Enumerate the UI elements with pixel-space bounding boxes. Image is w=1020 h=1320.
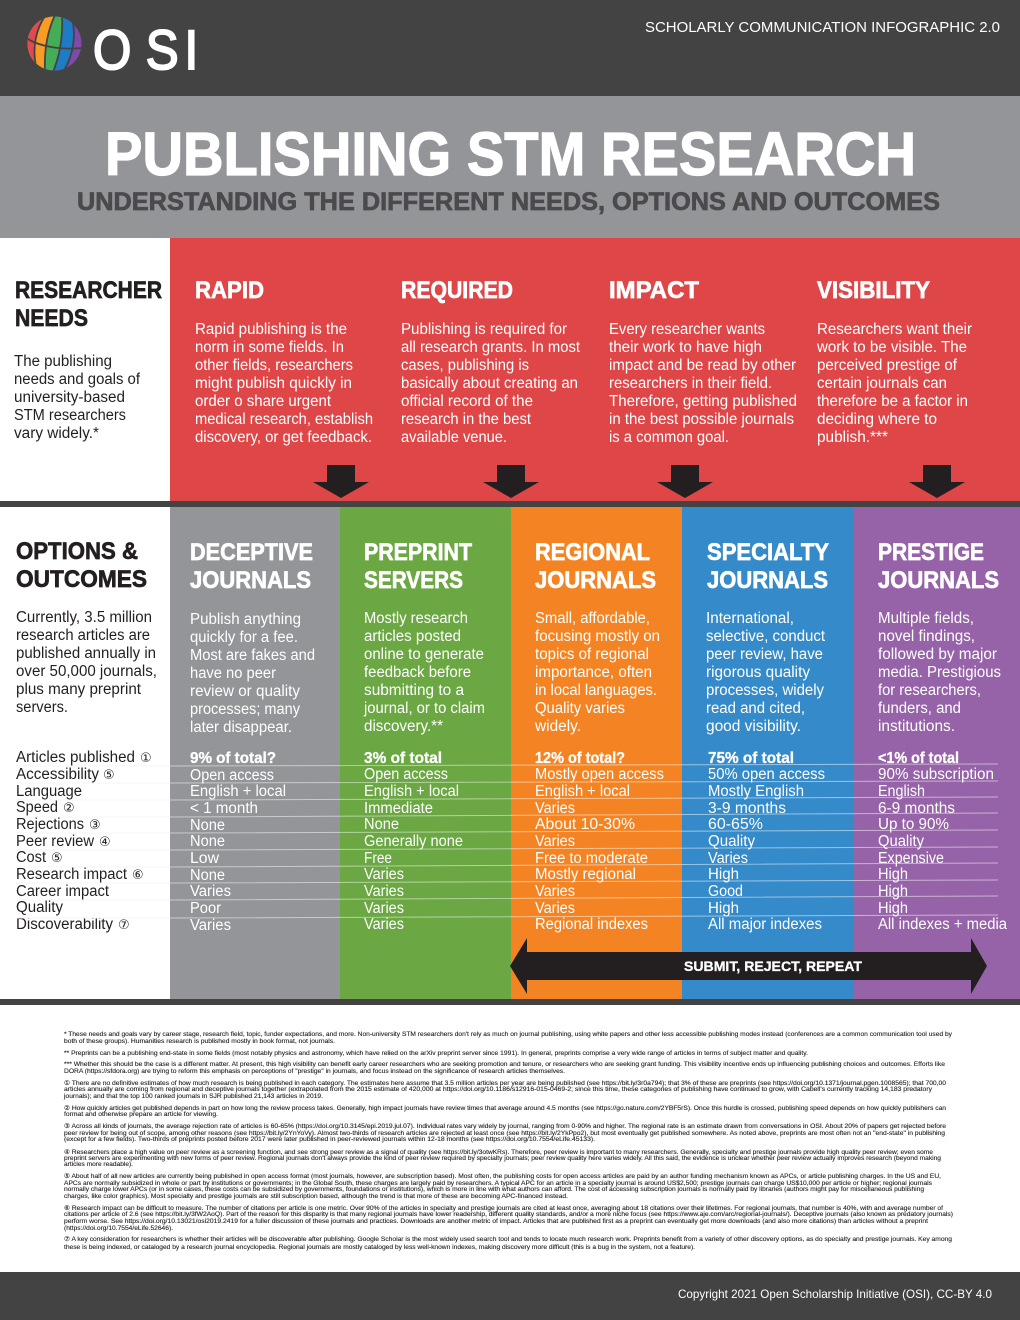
copyright: Copyright 2021 Open Scholarship Initiative (OSI), CC-BY 4.0: [678, 1287, 992, 1301]
text: deceptive body: later disappear.: [190, 719, 292, 736]
text: visibility body: deciding where to: [817, 411, 937, 428]
text: deceptive body: Most are fakes and: [190, 647, 315, 664]
text: specialty body: processes, widely: [706, 682, 824, 699]
panel: required: [401, 277, 581, 446]
footnote 7: these is being indexed, or cataloged by a research journal encyclopedia. Regional journals are mostly cataloged by less well-known indexes, making discovery more difficult (this is a bug in the system, not a feature).: [64, 1244, 695, 1251]
arrow: down 4: [909, 465, 965, 498]
table values: preprint: Varies: [364, 883, 404, 900]
table values: prestige: Expensive: [878, 850, 944, 867]
arrow label: SUBMIT, REJECT, REPEAT: [684, 958, 862, 974]
text: preprint body: submitting to a: [364, 682, 464, 699]
footnote 4: articles more readable).: [64, 1161, 133, 1168]
heading: regional journals: REGIONAL: [535, 539, 650, 566]
text: deceptive body: [190, 611, 315, 736]
table row labels: Speed: [16, 799, 58, 816]
table row labels: Accessibility: [16, 766, 99, 783]
table values: preprint: English + local: [364, 783, 459, 800]
table values: specialty: Good: [708, 883, 743, 900]
table row labels: Peer review: [16, 833, 95, 850]
text: specialty body: International,: [706, 610, 794, 627]
text: impact body: their work to have high: [609, 339, 762, 356]
table row labels: Cost: [16, 849, 47, 866]
table row labels: Research impact: [16, 866, 128, 883]
text: options description: research articles are: [16, 627, 150, 644]
title band: [0, 96, 1020, 238]
table row labels: ⑤: [51, 851, 63, 866]
heading: prestige journals: PRESTIGE: [878, 539, 984, 566]
table row labels: Articles published: [16, 749, 135, 766]
panel: regional journals: [534, 539, 664, 933]
heading: researcher needs: NEEDS: [15, 305, 88, 332]
table row labels: ⑤: [103, 768, 115, 783]
text: visibility body: certain journals can: [817, 375, 947, 392]
table values: deceptive: Varies: [190, 917, 231, 934]
footnote 5: charges, like color graphics). Most specialty and prestige journals are still subscription based, although the trend is that more of these are becoming APC-financed instead.: [64, 1193, 568, 1200]
table values: specialty: 3-9 months: [708, 800, 786, 817]
table values: regional: Mostly open access: [535, 766, 664, 783]
panel: deceptive journals: [190, 539, 315, 934]
table values: specialty: 75% of total: [708, 750, 794, 767]
footnote 1: journals); and that the top 100 ranked journals in SJR published 21,143 articles in 2019.: [63, 1093, 323, 1100]
table values: specialty: Varies: [708, 850, 748, 867]
text: regional body: in local languages.: [535, 682, 657, 699]
panel: visibility: [816, 277, 972, 446]
text: deceptive body: have no peer: [190, 665, 276, 682]
heading: researcher needs: RESEARCHER: [15, 277, 162, 304]
footnote 6: (https://doi.org/10.7554/eLife.52646).: [64, 1225, 173, 1232]
text: deceptive body: review or quality: [190, 683, 300, 700]
table values: prestige: High: [878, 900, 908, 917]
text: specialty body: read and cited,: [706, 700, 805, 717]
text: rapid body: order o share urgent: [195, 393, 332, 410]
table values: regional: Varies: [535, 833, 575, 850]
table row labels: ①: [140, 751, 152, 766]
table values: regional: [535, 750, 664, 933]
text: rapid body: discovery, or get feedback.: [195, 429, 372, 446]
text: regional body: topics of regional: [535, 646, 649, 663]
text: options description: servers.: [16, 699, 68, 716]
table values: specialty: Quality: [708, 833, 755, 850]
text: options description: over 50,000 journals,: [16, 663, 157, 680]
icon: OSI globe logo: [28, 16, 82, 70]
text: required body: cases, publishing is: [401, 357, 529, 374]
panel: needs background: [170, 238, 1020, 501]
text: prestige body: novel findings,: [878, 628, 975, 645]
text: required body: Publishing is required for: [401, 321, 567, 338]
heading: regional journals: [535, 539, 656, 594]
footnote 3: [64, 1122, 946, 1143]
table row labels: Quality: [16, 899, 63, 916]
text: options description: published annually in: [16, 645, 156, 662]
table values: specialty: High: [708, 900, 739, 917]
table values: regional: 12% of total?: [535, 750, 625, 767]
text: researcher needs description: The publishing: [14, 353, 112, 370]
table row labels: ⑥: [132, 868, 144, 883]
text: impact body: is a common goal.: [609, 429, 729, 446]
table values: regional: About 10-30%: [535, 816, 635, 833]
text: preprint body: articles posted: [364, 628, 461, 645]
footnote 3: ③ Across all kinds of journals, the average rejection rate of articles is 60-65% (https://doi.org/10.3145/epi.2019.jul.07). Individual rates vary widely by journal, ranging from 0-90% and higher. The regional rate is an estimate drawn from conversations in OSI. About 20% of papers get rejected before: [64, 1122, 946, 1130]
heading: impact: IMPACT: [609, 277, 699, 304]
footnote: asterisk: [64, 1031, 953, 1045]
text: deceptive body: Publish anything: [190, 611, 301, 628]
table values: deceptive: None: [190, 833, 225, 850]
text: visibility body: publish.***: [817, 429, 888, 446]
footnote 4: ④ Researchers place a high value on peer review as a screening function, and see strong peer review as a signal of quality (see https://bit.ly/3otwKRs). Therefore, peer review is important to many researchers. Generally, specialty and prestige journals provide high quality peer review; even some: [64, 1148, 933, 1156]
text: impact body: in the best possible journals: [609, 411, 794, 428]
text: specialty body: good visibility.: [706, 718, 801, 735]
text: specialty body: selective, conduct: [706, 628, 826, 645]
text: deceptive body: quickly for a fee.: [190, 629, 298, 646]
text: prestige body: institutions.: [878, 718, 955, 735]
table values: prestige: High: [878, 866, 908, 883]
table values: deceptive: None: [190, 817, 225, 834]
heading: researcher needs: [15, 277, 162, 332]
table values: deceptive: English + local: [190, 783, 286, 800]
text: preprint body: Mostly research: [364, 610, 468, 627]
table row labels: ⑦: [118, 918, 130, 933]
text: preprint body: feedback before: [364, 664, 471, 681]
footnote 7: [64, 1235, 952, 1251]
text: specialty body: rigorous quality: [706, 664, 810, 681]
text: rapid body: [195, 321, 373, 446]
footnote 4: preprint servers are experimenting with new forms of peer review. Regional journals don't always provide the kind of peer review required by specialty journals; peer review quality here varies widely. All this said, the evidence is unclear whether peer review actually improves research (beyond making: [64, 1155, 941, 1162]
table values: prestige: 90% subscription: [878, 766, 994, 783]
footnote 6: citations per article of 2.6 (see https://bit.ly/3fW2AoQ). Part of the reason for this disparity is that many regional journals have lower readership, different quality standards, and/or a more niche focus (see https://www.aje.com/arc/regional-journals/). Deceptive journals (also known as predatory journals): [64, 1211, 953, 1218]
text: options description: plus many preprint: [16, 681, 142, 698]
footnote: double asterisk: ** Preprints can be a publishing end-state in some fields (most notably physics and astronomy, which have relied on the arXiv preprint server since 1991). In general, preprints comprise a very wide range of articles in terms of subject matter and quality.: [64, 1050, 808, 1057]
text: required body: research in the best: [401, 411, 532, 428]
heading: prestige journals: JOURNALS: [878, 567, 999, 594]
text: regional body: Small, affordable,: [535, 610, 650, 627]
footnote 2: ② How quickly articles get published depends in part on how long the review process takes. Generally, high impact journals have review times that average around 4.5 months (see https://go.nature.com/2YBF5rS). Once this hurdle is crossed, publishing speed depends on how quickly publishers can: [64, 1104, 946, 1112]
text: researcher needs description: [14, 353, 141, 442]
footnote 2: format and otherwise prepare an article for viewing.: [64, 1111, 218, 1118]
footnote 2: [64, 1104, 946, 1118]
text: visibility body: [816, 321, 972, 446]
column backgrounds: [170, 507, 1020, 999]
table values: deceptive: < 1 month: [190, 800, 258, 817]
heading: preprint servers: PREPRINT: [364, 539, 472, 566]
text: rapid body: norm in some fields. In: [195, 339, 344, 356]
footnotes: [63, 1031, 953, 1251]
text: options description: Currently, 3.5 million: [16, 609, 152, 626]
table values: specialty: Mostly English: [708, 783, 804, 800]
table values: prestige: Up to 90%: [878, 816, 949, 833]
footnote 1: [63, 1079, 946, 1100]
heading: options and outcomes: OUTCOMES: [16, 566, 147, 593]
text: rapid body: Rapid publishing is the: [195, 321, 347, 338]
heading: specialty journals: [707, 539, 829, 594]
panel: options and outcomes intro: [16, 538, 157, 716]
panel: preprint servers: [363, 539, 485, 933]
footnote 7: ⑦ A key consideration for researchers is whether their articles will be discoverable after publishing. Google Scholar is the most widely used search tool and tends to locate much research work. Preprints benefit from a variety of other discovery options, as do specialty and prestige journals. Key among: [64, 1235, 952, 1243]
table values: regional: Varies: [535, 800, 575, 817]
text: impact body: researchers in their field.: [609, 375, 772, 392]
heading: specialty journals: SPECIALTY: [707, 539, 829, 566]
text: regional body: importance, often: [535, 664, 652, 681]
text: required body: basically about creating an: [401, 375, 578, 392]
text: deceptive body: processes; many: [190, 701, 300, 718]
table values: preprint: Varies: [364, 900, 404, 917]
footnote 4: [64, 1148, 941, 1168]
text: visibility body: Researchers want their: [817, 321, 972, 338]
panel: impact: [609, 277, 797, 446]
heading: required: REQUIRED: [401, 277, 513, 304]
table values: preprint: None: [364, 816, 399, 833]
footnote 3: peer review for being out of scope, among other reasons (see https://bit.ly/2YnYoVy). Almost two-thirds of research articles are rejected at least once (see https://bit.ly/2YkPpo2), but most eventually get published somewhere. As noted above, preprints are most often not an "end-state" in publishing: [64, 1130, 945, 1137]
table row labels: [16, 749, 152, 933]
table values: preprint: Free: [364, 850, 392, 867]
text: visibility body: work to be visible. The: [816, 339, 967, 356]
table values: deceptive: Poor: [190, 900, 221, 917]
divider bar top: [0, 501, 1020, 507]
text: rapid body: other fields, researchers: [195, 357, 353, 374]
table values: regional: Free to moderate: [535, 850, 648, 867]
footnote 1: articles annually are coming from regional and deceptive journals together (extrapolated from the 2015 estimate of 420,000 at https://doi.org/10.1186/s12916-015-0469-2; since this time, these categories of publishing have continued to grow, with Cabell's currently tracking 14,183 predatory: [64, 1086, 933, 1093]
arrow: down 1: [313, 465, 369, 498]
panel: prestige journals: [878, 539, 1007, 933]
text: required body: all research grants. In most: [401, 339, 581, 356]
text: regional body: focusing mostly on: [535, 628, 660, 645]
text: visibility body: perceived prestige of: [817, 357, 958, 374]
divider bar bottom: [0, 999, 1020, 1005]
table values: deceptive: 9% of total?: [190, 750, 276, 767]
table values: specialty: High: [708, 866, 739, 883]
footer bar: [0, 1272, 1020, 1320]
arrow: submit, reject, repeat: [510, 938, 987, 994]
text: prestige body: for researchers,: [878, 682, 981, 699]
table values: deceptive: [190, 750, 286, 934]
heading: preprint servers: SERVERS: [364, 567, 463, 594]
text: preprint body: online to generate: [364, 646, 484, 663]
footnote 5: normally charge lower APCs (or in some cases, these costs can be subsidized by governments, foundations or institutions), which is more in line with what authors can afford. The cost of accessing subscription journals is normally paid by libraries (authors might pay for miscellaneous publishing: [64, 1186, 924, 1193]
series label: SCHOLARLY COMMUNICATION INFOGRAPHIC 2.0: [645, 19, 1000, 36]
logo wordmark: OSI: [93, 19, 198, 82]
table values: deceptive: Varies: [190, 883, 231, 900]
panel: specialty journals: [706, 539, 829, 933]
footnote 6: perform worse. See https://doi.org/10.13021/osi2019.2419 for a fuller discussion of these journals and practices. Downloads are another metric of impact. Articles that are published first as a preprint can eventually get more downloads (and also more citations) than articles without a preprint: [64, 1218, 928, 1225]
heading: prestige journals: [878, 539, 999, 594]
text: preprint body: journal, or to claim: [363, 700, 485, 717]
text: researcher needs description: vary widely.*: [14, 425, 99, 442]
table values: deceptive: Low: [190, 850, 220, 867]
table values: preprint: [364, 750, 463, 933]
table values: prestige: <1% of total: [878, 750, 959, 767]
text: researcher needs description: university-based: [14, 389, 125, 406]
text: specialty body: peer review, have: [706, 646, 823, 663]
table row labels: Rejections: [16, 816, 84, 833]
panel: rapid: [195, 277, 373, 446]
text: impact body: impact and be read by other: [609, 357, 796, 374]
text: required body: official record of the: [401, 393, 533, 410]
arrow: down 2: [483, 465, 539, 498]
footnote: asterisk: * These needs and goals vary by career stage, research field, topic, funder expectations, and more. Non-university STM researchers don't rely as much on journal publishing, using white papers and other less accessible publishing modes instead (conferences are a common communication tool used by: [64, 1031, 953, 1038]
table values: specialty: 60-65%: [708, 816, 763, 833]
arrow: down 3: [657, 465, 713, 498]
text: specialty body: [706, 610, 826, 735]
heading: specialty journals: JOURNALS: [707, 567, 828, 594]
table values: deceptive: None: [190, 867, 225, 884]
footnote 5: [64, 1172, 941, 1200]
footnote 1: ① There are no definitive estimates of how much research is being published in each category. The estimates here assume that 3.5 million articles per year are being published (see https://bit.ly/3r0a794); that 3% of these are preprints (see https://doi.org/10.1371/journal.pgen.1008565); that 700,00: [64, 1079, 946, 1087]
text: preprint body: [363, 610, 485, 735]
table values: specialty: All major indexes: [708, 916, 822, 933]
footnote: triple asterisk: DORA (https://sfdora.org) are trying to reform this emphasis on perceptions of "prestige" in journals, and focus instead on the significance of research articles themselves.: [64, 1068, 565, 1075]
text: regional body: [534, 610, 660, 735]
text: impact body: [609, 321, 797, 446]
table values: preprint: Varies: [364, 866, 404, 883]
heading: regional journals: JOURNALS: [535, 567, 656, 594]
table values: regional: Varies: [535, 883, 575, 900]
heading: preprint servers: [364, 539, 472, 594]
table values: preprint: Immediate: [364, 800, 433, 817]
text: required body: available venue.: [401, 429, 507, 446]
heading: rapid: RAPID: [195, 277, 264, 304]
table values: specialty: [708, 750, 825, 933]
heading: options and outcomes: [16, 538, 147, 593]
table values: preprint: Open access: [364, 766, 448, 783]
heading: deceptive journals: [190, 539, 313, 594]
table values: prestige: Quality: [878, 833, 924, 850]
text: prestige body: Multiple fields,: [878, 610, 974, 627]
text: required body: [401, 321, 581, 446]
table values: preprint: 3% of total: [364, 750, 442, 767]
text: prestige body: media. Prestigious: [878, 664, 1001, 681]
text: rapid body: might publish quickly in: [195, 375, 352, 392]
footnote: triple asterisk: *** Whether this should be the case is a different matter. At present, this high visibility can benefit early career researchers who are seeking promotion and tenure, or researchers who are seeking grant funding. This visibility incentive ends up influencing publishing choices and outcomes. Efforts like: [64, 1061, 945, 1068]
table values: deceptive: Open access: [190, 767, 274, 784]
text: regional body: widely.: [534, 718, 581, 735]
table values: regional: Mostly regional: [535, 866, 636, 883]
footnote 3: (except for a few fields). Two-thirds of preprints posted before 2017 were later published in peer-reviewed journals within 12-18 months (see https://doi.org/10.7554/eLife.45133).: [64, 1136, 595, 1143]
table values: prestige: English: [878, 783, 925, 800]
heading: visibility: VISIBILITY: [817, 277, 930, 304]
text: regional body: Quality varies: [535, 700, 625, 717]
heading: options and outcomes: OPTIONS &: [16, 538, 138, 565]
footnote 5: APCs are normally subsidized in whole or part by institutions or governments; in the Global South, these charges are largely paid by researchers. A typical APC for an article in a specialty journal is around US$2,500; prestige journals can charge US$10,000 per article or higher; regional journals: [64, 1180, 933, 1187]
table row labels: ③: [89, 818, 101, 833]
text: rapid body: medical research, establish: [195, 411, 373, 428]
subtitle: UNDERSTANDING THE DIFFERENT NEEDS, OPTIONS AND OUTCOMES: [77, 188, 940, 216]
text: researcher needs description: STM researchers: [14, 407, 126, 424]
heading: deceptive journals: JOURNALS: [190, 567, 311, 594]
heading: deceptive journals: DECEPTIVE: [190, 539, 313, 566]
footnote: asterisk: both of these groups). Humanities research is published mostly in book format, not journals.: [64, 1038, 335, 1045]
text: options description: [16, 609, 157, 716]
text: impact body: Every researcher wants: [609, 321, 765, 338]
footnote 5: ⑤ About half of all new articles are currently being published in open access format (most journals, however, are subscription based). Most often, the publishing costs for open access articles are paid by an author funding mechanism known as APCs, or article publishing charges. In the US and EU,: [64, 1172, 941, 1180]
text: researcher needs description: needs and goals of: [14, 371, 141, 388]
footnote 6: [64, 1204, 953, 1232]
footnote: triple asterisk: [64, 1061, 945, 1075]
table values: prestige: 6-9 months: [878, 800, 955, 817]
table row labels: Language: [16, 783, 82, 800]
panel: researcher needs intro: [0, 238, 170, 501]
table values: regional: Varies: [535, 900, 575, 917]
table row labels: Career impact: [16, 883, 110, 900]
footnote 6: ⑥ Research impact can be difficult to measure. The number of citations per article is one metric. Over 90% of the articles in specialty and prestige journals are cited at least once, averaging about 18 citations over their lifetimes. For regional journals, that number is 40%, with and average number of: [64, 1204, 943, 1212]
table row labels: ②: [63, 801, 75, 816]
text: prestige body: [878, 610, 1001, 735]
table values: preprint: Generally none: [364, 833, 463, 850]
text: impact body: Therefore, getting published: [609, 393, 797, 410]
table values: prestige: All indexes + media: [878, 916, 1007, 933]
title: PUBLISHING STM RESEARCH: [105, 120, 916, 188]
table values: prestige: High: [878, 883, 908, 900]
text: visibility body: therefore be a factor in: [817, 393, 968, 410]
text: preprint body: discovery.**: [364, 718, 443, 735]
text: prestige body: followed by major: [878, 646, 997, 663]
table values: regional: English + local: [535, 783, 630, 800]
table values: prestige: [878, 750, 1007, 933]
table row labels: ④: [99, 835, 111, 850]
table values: regional: Regional indexes: [535, 916, 648, 933]
table row labels: Discoverability: [16, 916, 113, 933]
text: prestige body: funders, and: [878, 700, 961, 717]
header bar: [0, 0, 1020, 96]
table values: preprint: Varies: [364, 916, 404, 933]
table values: specialty: 50% open access: [708, 766, 825, 783]
